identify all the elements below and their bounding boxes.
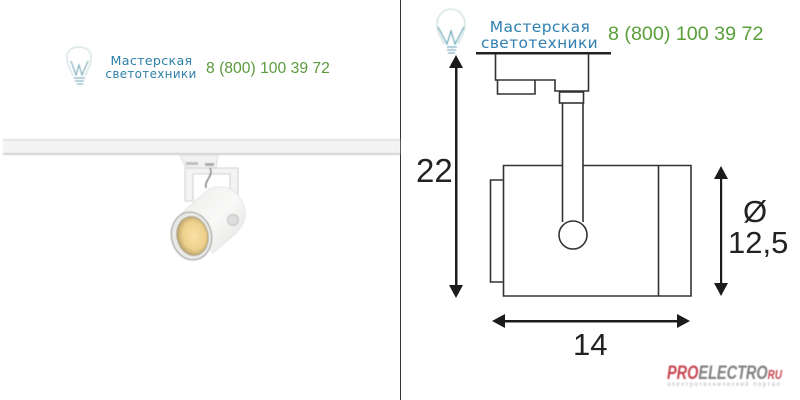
bracket [185,168,238,226]
lens ring [167,208,216,264]
front cap [490,180,504,282]
label: diameter: Ø [743,194,767,229]
label: diameter: 12,5 [728,225,788,260]
label: length: 14 [573,327,607,362]
arrow: length 14 [492,314,690,328]
rear section [658,166,660,296]
icon: light bulb [67,47,91,84]
brand name: светотехники [105,67,197,81]
lamp body [182,187,245,253]
logo: right panel [437,9,763,53]
lamp body [504,166,691,296]
track rail [3,139,400,155]
adapter tab [498,80,535,94]
arrow: diameter [714,166,728,296]
panel: dimension drawing [416,9,788,388]
logo: left panel [67,47,330,84]
brand name: светотехники [481,34,598,52]
watermark: proelectro: PROELECTRORU [667,363,782,384]
label: height: 22 [416,152,453,189]
cable [206,168,211,188]
connector [560,92,584,103]
phone number: 8 (800) 100 39 72 [608,23,763,45]
stem [562,103,583,222]
icon: light bulb [437,9,465,53]
panel: product photo [3,47,400,264]
track adapter [496,54,588,91]
watermark: proelectro: электротехнический портал [667,381,780,388]
pivot circle [559,221,587,249]
phone number: 8 (800) 100 39 72 [206,60,330,77]
ceiling line [476,52,611,54]
brand name: Мастерская [490,18,590,36]
brand name: Мастерская [110,53,192,68]
spotlight photo [167,155,245,264]
lamp outline drawing [476,52,691,296]
lens glow [173,214,212,258]
pivot [228,214,238,226]
panel divider [400,0,401,400]
arrow: height 22 [449,55,463,298]
adapter [180,155,218,168]
